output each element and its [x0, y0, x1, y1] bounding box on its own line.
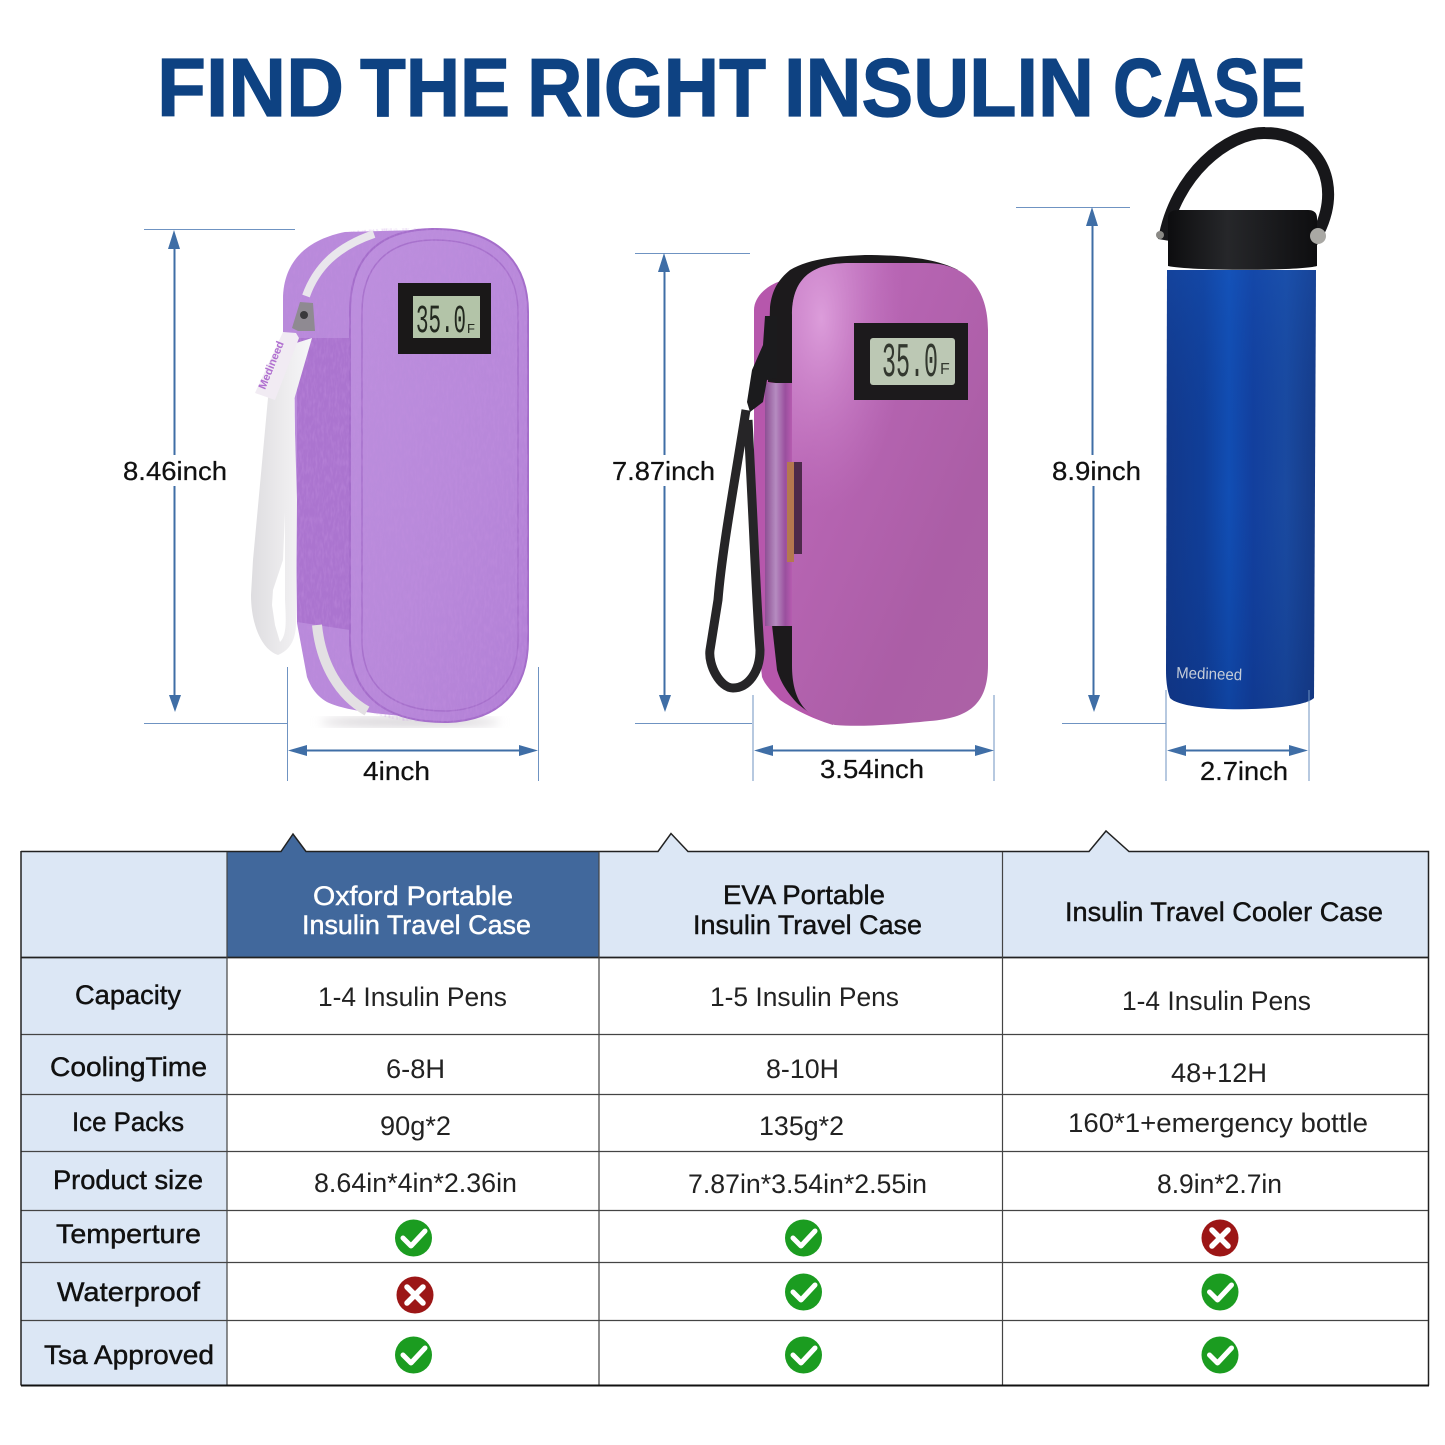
column headers: Insulin Travel Cooler Case	[1065, 897, 1383, 927]
table cell fills	[21, 831, 1428, 1385]
row labels: Temperture	[56, 1219, 201, 1249]
product size values: 8.9in*2.7in	[1157, 1169, 1282, 1199]
cap	[1168, 210, 1317, 270]
column headers: Insulin Travel Case	[693, 910, 922, 940]
icon: check tsa bottle	[1202, 1336, 1238, 1374]
icon: check waterproof bottle	[1202, 1274, 1238, 1310]
comparison table	[21, 831, 1429, 1386]
column headers	[302, 880, 1383, 940]
title: CASE	[1113, 41, 1306, 134]
dimensions: bottle: 2.7inch	[1200, 756, 1288, 786]
side strip	[765, 383, 792, 626]
dimensions: Oxford case	[123, 230, 538, 786]
product: Oxford portable case	[251, 225, 530, 727]
dimensions: bottle: 8.9inch	[1052, 456, 1141, 486]
zipper pull	[292, 302, 315, 331]
thermometer	[854, 323, 968, 400]
tan label	[787, 462, 794, 562]
column headers: Insulin Travel Case	[302, 910, 531, 940]
cooling time values: 6-8H	[386, 1054, 445, 1084]
icon: check temperature oxford	[395, 1220, 432, 1256]
icon: check tsa oxford	[395, 1336, 432, 1374]
dimensions: EVA case: 3.54inch	[820, 754, 924, 784]
cooling time values: 48+12H	[1171, 1058, 1267, 1088]
black zipper band	[768, 255, 958, 724]
brand text: Medineed	[1176, 665, 1242, 684]
column headers: Oxford Portable	[313, 881, 513, 911]
product: EVA portable case	[710, 255, 988, 726]
thermometer: 35.0	[882, 337, 938, 391]
case back body	[283, 230, 420, 718]
thermometer	[398, 283, 491, 354]
table grid	[21, 831, 1429, 1386]
icon: cross waterproof oxford	[396, 1276, 434, 1314]
dimensions: EVA case	[612, 253, 994, 784]
dimensions: Oxford case: 4inch	[363, 756, 430, 786]
front panel	[350, 229, 528, 722]
icon: cross temperature bottle	[1202, 1220, 1238, 1256]
title	[157, 41, 1306, 134]
bottle body	[1166, 270, 1316, 709]
ice pack values	[380, 1108, 1368, 1141]
front shell	[792, 263, 988, 726]
row labels: Tsa Approved	[44, 1340, 214, 1370]
wrist strap	[251, 338, 312, 655]
dimensions: Oxford case: 8.46inch	[123, 456, 227, 486]
ice pack values: 90g*2	[380, 1111, 451, 1141]
dimensions: bottle	[1016, 207, 1309, 786]
capacity values: 1-4 Insulin Pens	[318, 982, 507, 1012]
title: INSULIN	[784, 41, 1094, 134]
cooling time values	[386, 1054, 1267, 1088]
row labels: Ice Packs	[72, 1107, 184, 1137]
product size values: 8.64in*4in*2.36in	[314, 1168, 517, 1198]
thermometer: 35.0	[416, 300, 466, 345]
title: FIND	[157, 41, 344, 134]
side pocket	[297, 338, 350, 630]
product: Oxford portable case: Medineed	[257, 340, 287, 391]
zipper	[306, 234, 374, 711]
ice pack values: 135g*2	[759, 1111, 844, 1141]
row labels	[44, 980, 214, 1370]
title: RIGHT	[527, 41, 766, 134]
ice pack values: 160*1+emergency bottle	[1068, 1108, 1368, 1138]
capacity values: 1-4 Insulin Pens	[1122, 986, 1311, 1016]
capacity values	[318, 982, 1311, 1016]
icon: check tsa eva	[785, 1336, 822, 1374]
column headers: EVA Portable	[723, 880, 885, 910]
capacity values: 1-5 Insulin Pens	[710, 982, 899, 1012]
case back body	[754, 270, 833, 725]
thermometer: F	[940, 361, 950, 378]
cooling time values: 8-10H	[766, 1054, 839, 1084]
product size values	[314, 1168, 1282, 1199]
product: insulated bottle	[1156, 133, 1328, 709]
icon: check temperature eva	[785, 1220, 822, 1256]
title: THE	[360, 41, 510, 134]
strap tag	[255, 332, 299, 400]
rivets	[1310, 228, 1326, 244]
dimensions: EVA case: 7.87inch	[612, 456, 715, 486]
zipper pull	[747, 316, 777, 412]
row labels: CoolingTime	[50, 1052, 207, 1082]
thermometer: F	[467, 321, 475, 336]
row labels: Waterproof	[57, 1277, 201, 1307]
handle	[1164, 133, 1328, 245]
wrist strap	[710, 410, 760, 688]
icon: check waterproof eva	[785, 1274, 822, 1310]
row labels: Capacity	[75, 980, 182, 1010]
product size values: 7.87in*3.54in*2.55in	[688, 1169, 927, 1199]
row labels: Product size	[53, 1165, 203, 1195]
